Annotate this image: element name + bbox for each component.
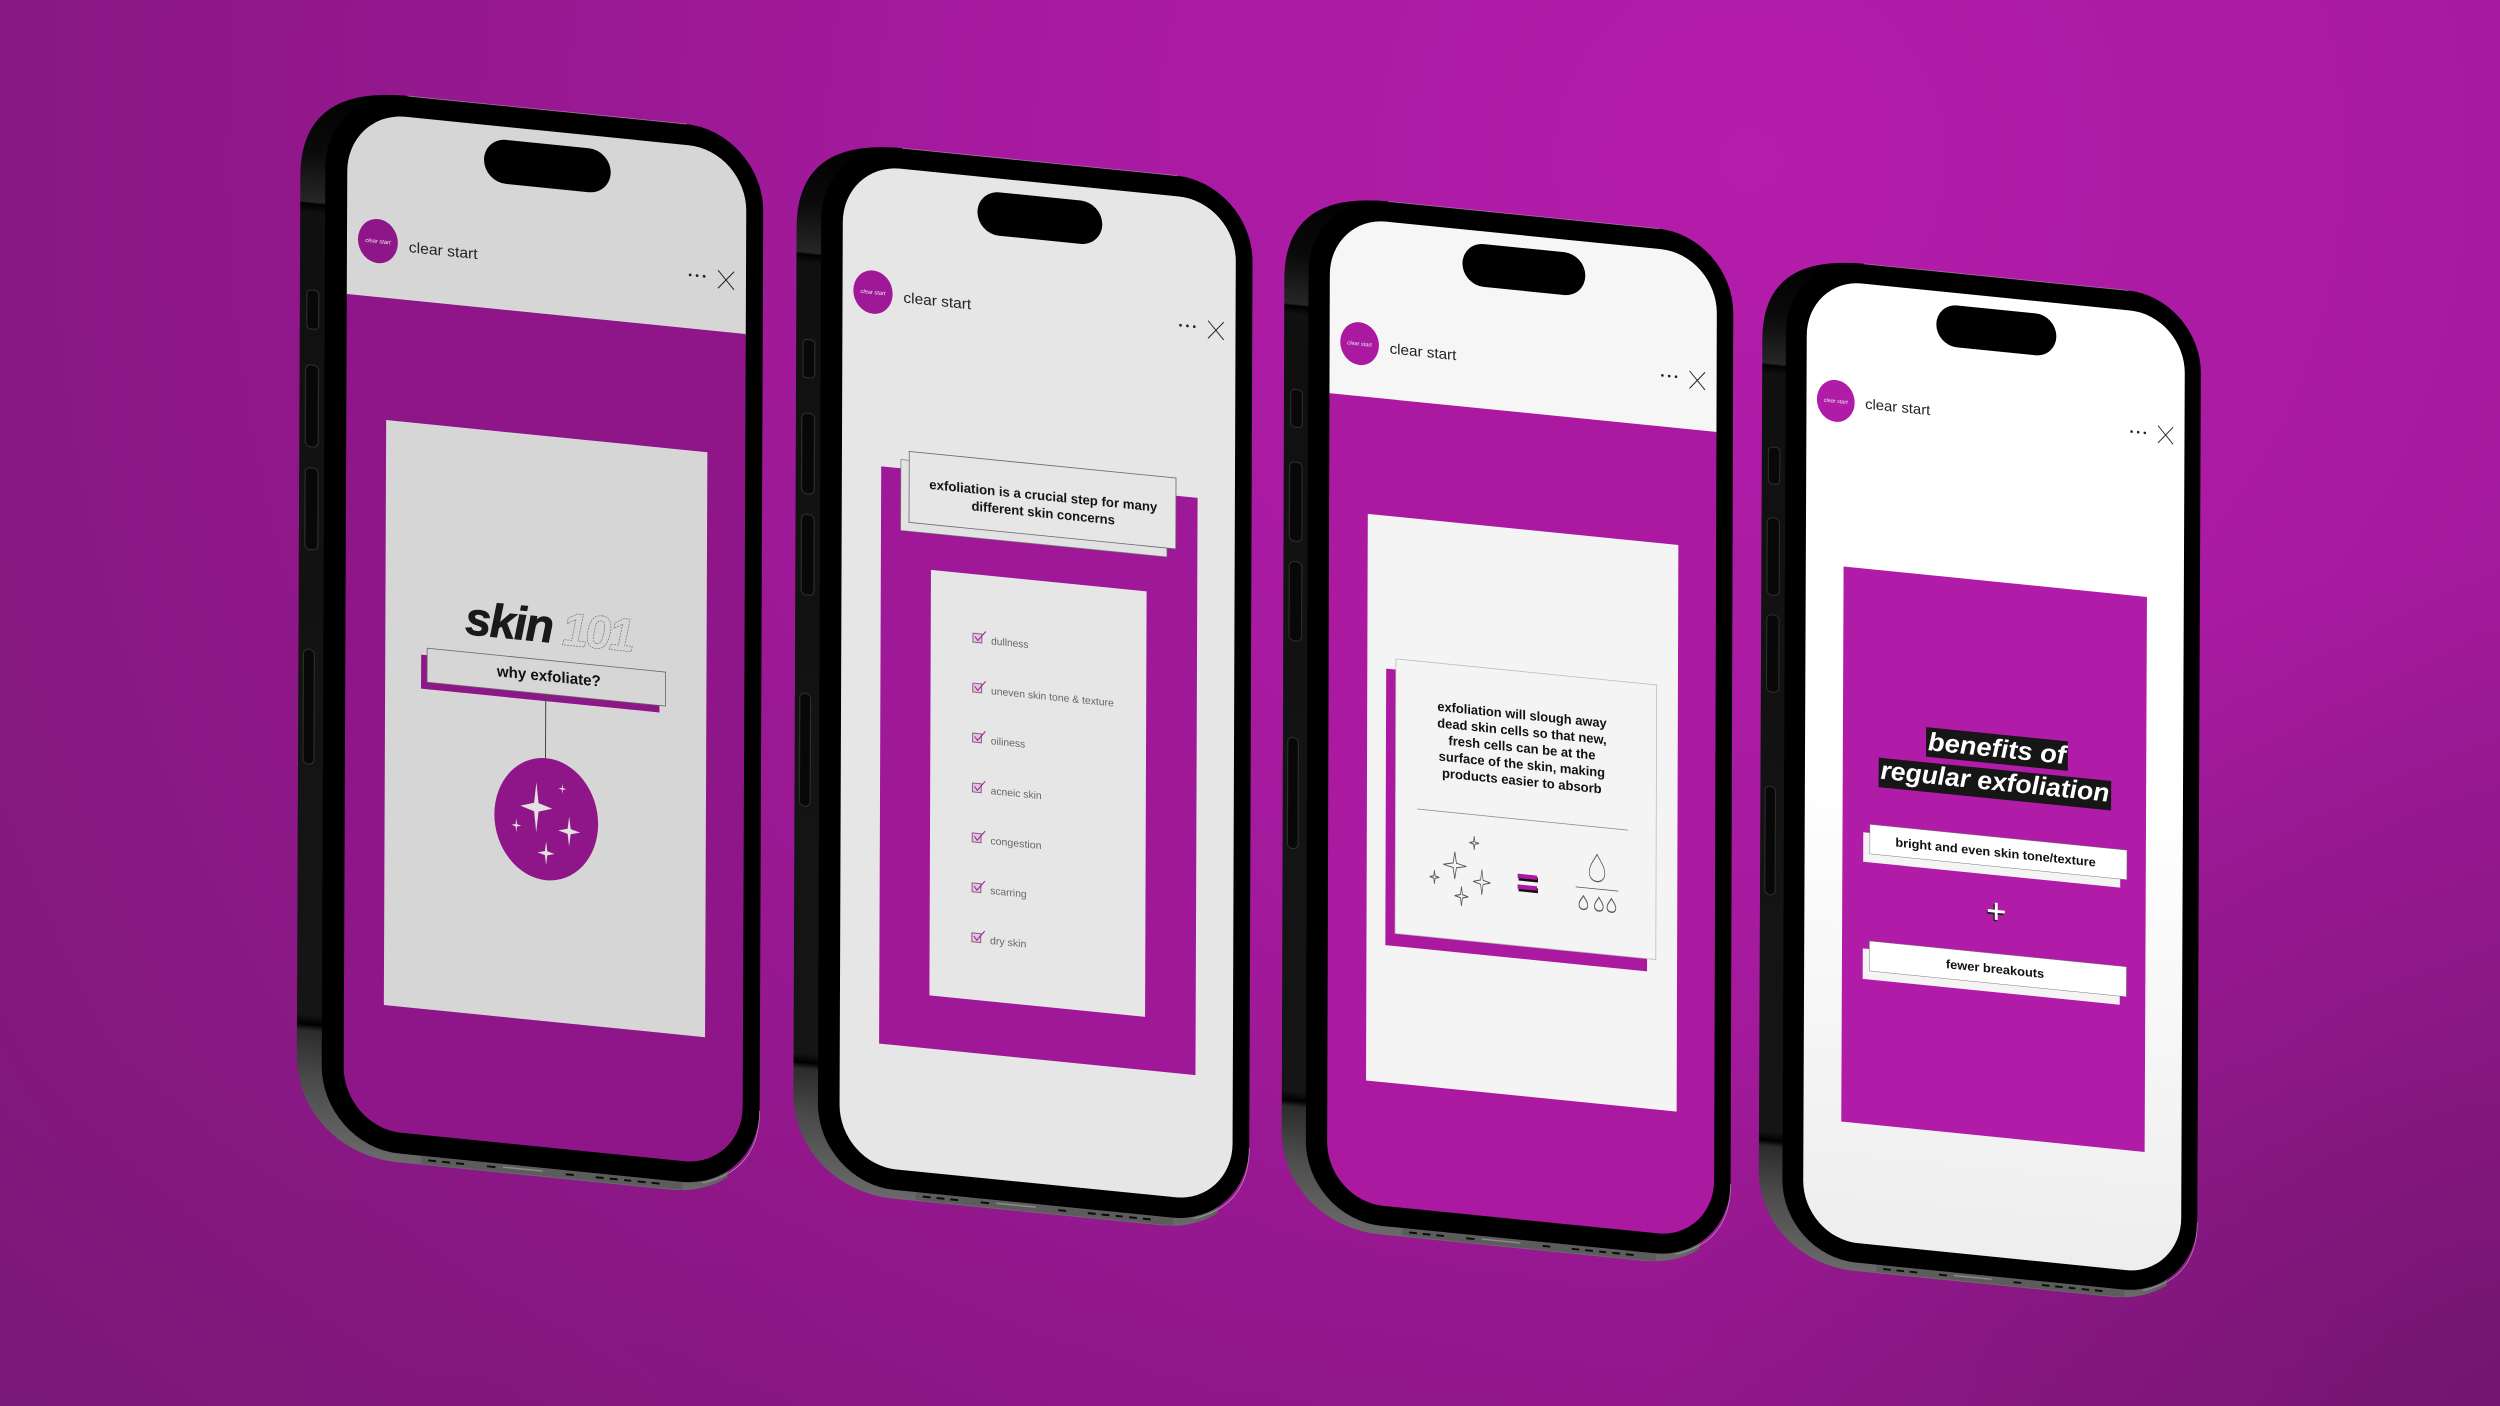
avatar	[358, 217, 398, 265]
dynamic island	[1936, 303, 2056, 357]
body text	[1437, 699, 1607, 797]
avatar: clear start	[1824, 398, 1848, 406]
check item: congestion	[972, 830, 1041, 850]
check item: congestion: congestion	[990, 836, 1042, 852]
phone 3: how exfoliation works	[1281, 191, 1734, 1270]
title: regular exfoliation: regular exfoliation	[1881, 757, 2109, 808]
check item: scarring	[972, 880, 1027, 901]
account name: clear start	[1390, 341, 1456, 364]
benefit 2 back	[1863, 948, 2120, 1005]
inner box	[1395, 659, 1657, 960]
body text: exfoliation will slough away	[1437, 699, 1607, 731]
avatar	[853, 268, 893, 316]
check item: oiliness	[972, 731, 1025, 748]
check item: uneven skin tone	[972, 681, 1114, 706]
phone 4: benefits	[1758, 254, 2201, 1305]
more dots	[689, 273, 705, 278]
account name: clear start	[1865, 397, 1930, 419]
close icon	[1689, 371, 1705, 390]
close icon	[1208, 321, 1224, 340]
story background	[834, 158, 1241, 1212]
heading text: exfoliation is a crucial step for many	[929, 477, 1158, 515]
avatar	[1340, 320, 1379, 367]
more dots	[1661, 374, 1677, 378]
dynamic island	[977, 190, 1102, 246]
equals sign	[1518, 874, 1538, 893]
check item: dry skin: dry skin	[990, 936, 1027, 951]
phone 2: skin concerns checklist	[793, 138, 1253, 1234]
phone 1: skin 101	[296, 85, 764, 1199]
plus sign	[1987, 902, 2005, 922]
front note	[909, 451, 1176, 549]
story background	[1798, 273, 2190, 1292]
body text: products easier to absorb	[1442, 765, 1602, 796]
water drop icons	[1576, 852, 1618, 913]
benefit 2 front	[1869, 941, 2126, 997]
white card	[1366, 514, 1678, 1112]
story purple background	[1322, 393, 1721, 1255]
story purple background	[338, 294, 751, 1174]
check item: uneven skin tone: uneven skin tone & texture	[991, 686, 1114, 710]
benefit 1 front	[1870, 824, 2127, 880]
account name: clear start	[409, 239, 479, 263]
screen	[834, 158, 1241, 1212]
dynamic island	[1462, 242, 1585, 297]
purple frame	[879, 466, 1198, 1075]
white card	[384, 420, 707, 1037]
benefit 1 back	[1863, 832, 2120, 888]
divider	[1417, 809, 1628, 830]
title: skin: skin	[465, 591, 554, 653]
story header background	[342, 106, 752, 336]
avatar: clear start	[1347, 340, 1372, 349]
title: 101 outlined: 101	[562, 602, 635, 662]
sparkle circle	[494, 753, 598, 885]
account name: clear start	[903, 291, 971, 313]
screen	[1322, 211, 1722, 1255]
check item: acneic skin	[972, 781, 1041, 800]
body text: surface of the skin, making	[1439, 749, 1605, 780]
check item: dullness: dullness	[991, 636, 1028, 651]
avatar: clear start	[861, 289, 886, 297]
check item: oiliness: oiliness	[991, 736, 1025, 751]
check item: dry skin	[971, 930, 1026, 948]
avatar	[1817, 378, 1855, 424]
purple card	[1841, 566, 2147, 1152]
check item: dullness	[972, 631, 1028, 648]
close icon	[718, 270, 734, 290]
sparkle icons	[1430, 832, 1491, 909]
close icon	[2158, 426, 2173, 444]
connector line	[545, 694, 546, 758]
phone body	[1758, 254, 2201, 1305]
phone body	[793, 138, 1253, 1234]
phone body	[1281, 191, 1734, 1270]
label shadow	[421, 655, 660, 712]
benefit 1 text: bright and even skin tone/texture	[1895, 835, 2096, 870]
check item: acneic skin: acneic skin	[991, 786, 1042, 802]
dynamic island	[484, 138, 611, 194]
body text: dead skin cells so that new,	[1437, 715, 1607, 747]
check item: scarring: scarring	[990, 886, 1027, 901]
label text: why exfoliate?	[496, 663, 601, 691]
heading text: different skin concerns	[971, 498, 1115, 528]
back note	[901, 459, 1167, 557]
label box	[427, 648, 666, 706]
body text: fresh cells can be at the	[1448, 733, 1595, 763]
purple shadow	[1385, 669, 1648, 971]
avatar: clear start	[365, 238, 391, 246]
more dots	[1179, 324, 1196, 328]
story header background	[1325, 211, 1722, 435]
phone body	[296, 85, 764, 1199]
screen	[1798, 273, 2190, 1292]
title: benefits of: benefits of	[1928, 728, 2069, 770]
checklist card	[929, 570, 1147, 1017]
benefit 2 text: fewer breakouts	[1946, 957, 2044, 981]
screen	[338, 106, 752, 1174]
more dots	[2130, 430, 2146, 434]
